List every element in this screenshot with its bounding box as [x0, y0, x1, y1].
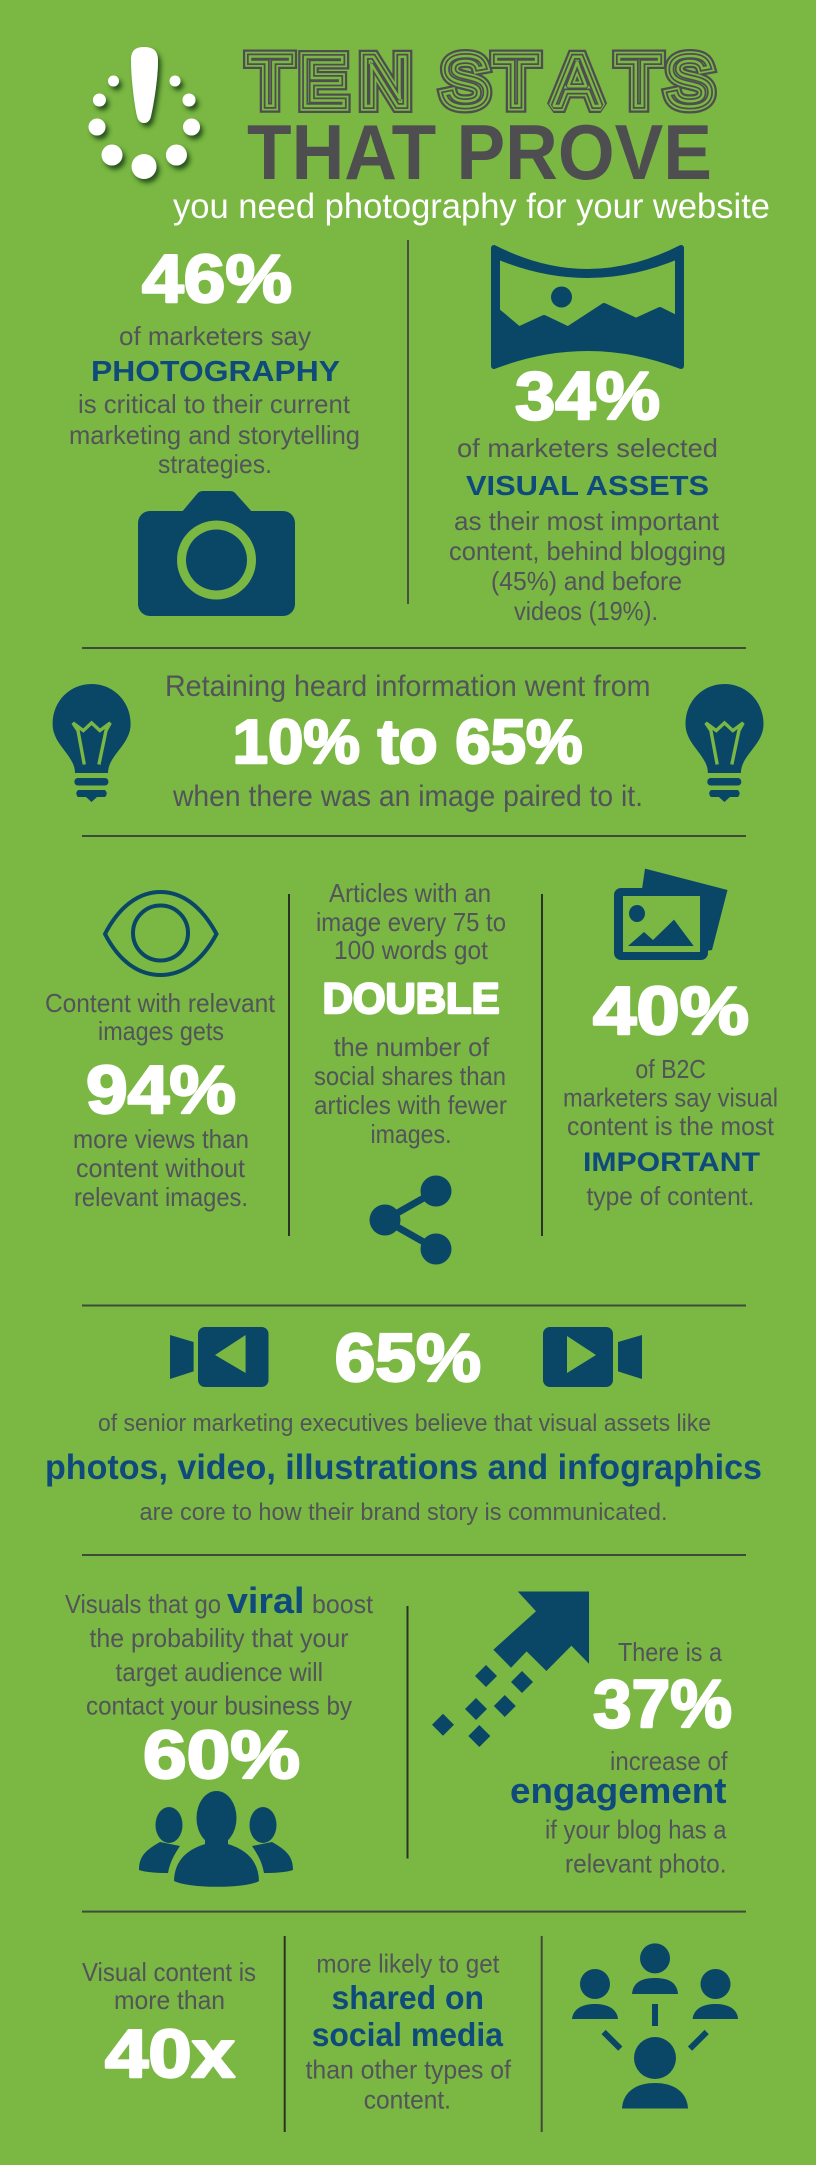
text block: engagement: increase of — [610, 1746, 728, 1776]
text block: viral: Visuals that go — [65, 1589, 221, 1619]
text block: more views: relevant images. — [74, 1182, 248, 1212]
panel: shared on social media: than other types of — [306, 2055, 512, 2085]
icon: audience people — [139, 1791, 293, 1889]
panel: shared on social media: social media — [312, 2016, 504, 2053]
stat: 40%: 40% — [593, 973, 749, 1049]
panel: retaining information — [53, 670, 764, 813]
text block: viral: contact your business by — [86, 1691, 352, 1721]
panel: 60 percent viral — [65, 1580, 374, 1889]
text block: relevant images — [45, 988, 276, 1046]
text block: retaining — [165, 670, 650, 813]
title: ten stats striped: TEN STATS — [248, 43, 713, 122]
text block: relevant images: Content with relevant — [45, 988, 276, 1018]
text block: photography stat: of marketers say — [119, 321, 311, 351]
panel: 65 percent senior marketing — [45, 1320, 762, 1526]
panel: 94 percent views — [45, 892, 276, 1212]
icon: panorama landscape — [494, 248, 681, 366]
text block: photography stat — [69, 321, 360, 479]
stat: 34%: 34% — [515, 358, 660, 434]
text block: articles: Articles with an — [329, 878, 491, 908]
text block: retaining: when there was an image paired to it. — [172, 780, 643, 813]
text block: shares: images. — [370, 1119, 452, 1149]
text block: visual assets stat: VISUAL ASSETS — [466, 470, 709, 501]
icon: exclamation mark with dots — [88, 47, 200, 179]
panel: shared on social media: content. — [364, 2084, 451, 2114]
text block: engagement: if your blog has a — [545, 1815, 727, 1845]
panel: 40 percent b2c — [563, 869, 778, 1211]
text block: viral: boost — [312, 1589, 374, 1619]
text block: more views: more views than — [73, 1124, 249, 1154]
icon: video right — [543, 1327, 642, 1387]
text block: there is a: There is a — [618, 1637, 722, 1667]
title: that prove: THAT PROVE — [247, 108, 712, 196]
panel: 40x — [82, 1957, 256, 2092]
text block: photography stat: is critical to their current — [78, 389, 351, 419]
subtitle: you need photography for your website — [173, 187, 770, 226]
icon: sun dot — [551, 286, 572, 308]
text block: viral — [65, 1580, 374, 1721]
panel: 37 percent engagement — [432, 1592, 732, 1879]
panel: shared on social media: more likely to get — [316, 1948, 500, 1978]
text block: photography stat: marketing and storytelling — [69, 420, 360, 450]
text block: visual assets stat: as their most important — [454, 506, 720, 536]
text block: executives — [45, 1410, 762, 1526]
text block: articles: 100 words got — [334, 935, 489, 965]
text block: visual content: more than — [114, 1985, 225, 2015]
text block: viral: viral — [227, 1580, 304, 1621]
text block: photography stat: PHOTOGRAPHY — [91, 356, 340, 388]
text block: engagement: engagement — [510, 1770, 727, 1811]
text block: relevant images: images gets — [98, 1016, 224, 1046]
text block: b2c: content is the most — [567, 1111, 775, 1141]
text block: b2c — [563, 1054, 778, 1211]
icon: camera — [138, 491, 295, 616]
text block: b2c: marketers say visual — [563, 1082, 778, 1112]
text block: more views: content without — [76, 1153, 246, 1183]
text block: b2c: of B2C — [635, 1054, 706, 1084]
text block: shares — [314, 1032, 507, 1149]
text block: photography stat: strategies. — [158, 449, 272, 479]
stat: double: DOUBLE — [323, 975, 500, 1023]
text block: visual content: Visual content is — [82, 1957, 256, 1987]
icon: video left — [170, 1327, 268, 1387]
icon: diamonds — [432, 1665, 533, 1747]
icon: light bulb right — [686, 684, 764, 802]
text block: more views — [73, 1124, 249, 1212]
text block: engagement — [510, 1746, 728, 1879]
stat: 40x: 40x — [105, 2016, 235, 2092]
text block: visual assets stat: content, behind blogging — [449, 536, 726, 566]
text block: engagement: relevant photo. — [565, 1849, 726, 1879]
text block: executives: are core to how their brand story is communicated. — [140, 1499, 668, 1526]
text block: visual assets stat: videos (19%). — [514, 596, 658, 626]
panel: 34 percent visual assets — [449, 248, 726, 626]
stat: 46%: 46% — [142, 241, 292, 317]
text block: executives: photos, video, illustrations and infographics — [45, 1448, 762, 1487]
title: ten stats striped: TEN STATS — [248, 43, 713, 122]
icon: network of people — [572, 1943, 738, 2108]
text block: b2c: type of content. — [586, 1181, 754, 1211]
title: ten stats striped: TEN STATS — [248, 43, 713, 122]
text block: retaining: 10% to 65% — [233, 708, 583, 777]
panel: 46 percent photography — [69, 241, 360, 616]
icon: photos — [614, 869, 728, 960]
text block: articles: image every 75 to — [316, 907, 506, 937]
panel: shared on social media: shared on — [332, 1979, 484, 2016]
icon: light bulb left — [53, 684, 131, 802]
panel: shared on social media — [306, 1948, 512, 2114]
text block: executives: of senior marketing executives believe that visual assets like — [98, 1410, 711, 1437]
icon: share — [370, 1176, 452, 1264]
text block: articles — [316, 878, 506, 965]
text block: shares: social shares than — [314, 1061, 506, 1091]
divider: vertical — [407, 240, 409, 604]
icon: rising arrow — [493, 1592, 589, 1671]
title: ten stats striped: TEN STATS — [248, 43, 713, 122]
icon: eye — [105, 892, 216, 975]
text block: b2c: IMPORTANT — [583, 1147, 761, 1177]
text block: visual assets stat — [449, 433, 726, 626]
stat: 94%: 94% — [86, 1052, 236, 1128]
text block: visual assets stat: of marketers selected — [457, 433, 718, 463]
text block: shares: articles with fewer — [314, 1090, 507, 1120]
text block: visual assets stat: (45%) and before — [491, 566, 682, 596]
panel: double social shares — [314, 878, 507, 1264]
text block: viral: the probability that your — [90, 1623, 349, 1653]
stat: 60%: 60% — [143, 1717, 300, 1793]
stat: 65%: 65% — [335, 1320, 481, 1396]
text block: viral: target audience will — [116, 1657, 323, 1687]
text block: shares: the number of — [334, 1032, 490, 1062]
stat: 37%: 37% — [593, 1666, 732, 1742]
text block: retaining: Retaining heard information went from — [165, 670, 650, 703]
text block: visual content — [82, 1957, 256, 2015]
panel: header — [88, 43, 770, 226]
